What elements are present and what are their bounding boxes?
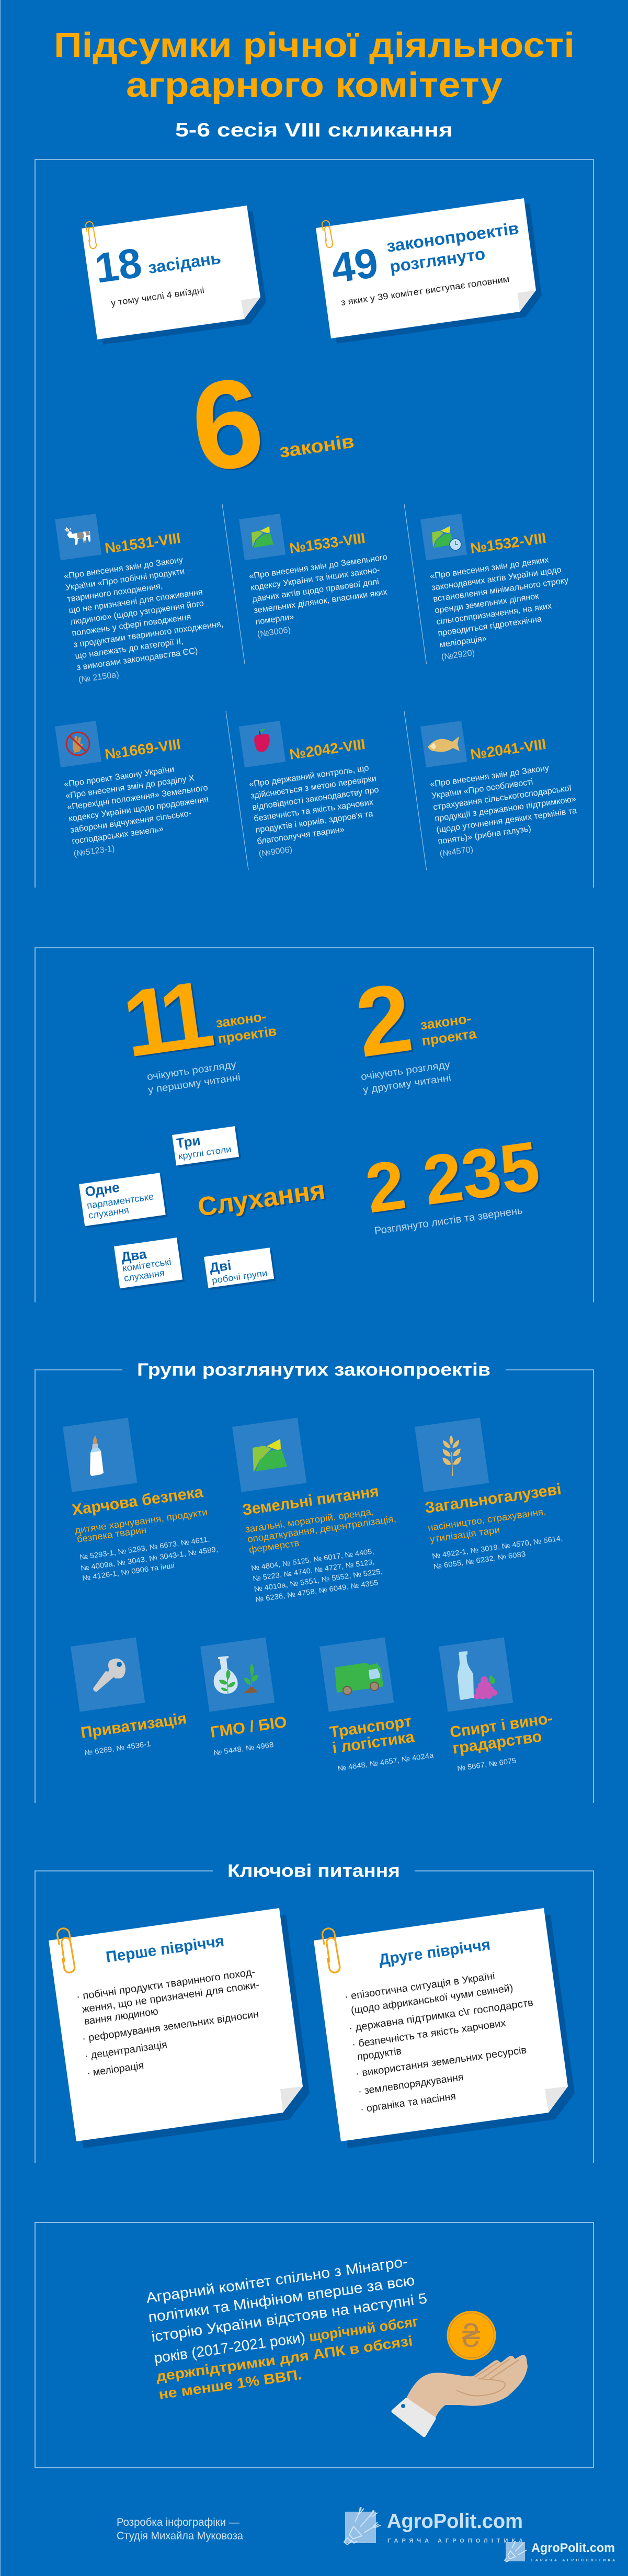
law text: понять)» (рибна галузь) [437, 824, 532, 846]
issue list [76, 1966, 260, 2079]
icon: hand [393, 2355, 528, 2435]
group: general: Загальногалузеві [424, 1481, 562, 1517]
law text [63, 760, 215, 859]
icon: paperclip [58, 1928, 75, 1972]
card: parliamentary hearing: слухання [88, 1205, 130, 1221]
stat: 2 235 letters: 2 235 [361, 1127, 544, 1228]
stat: 11 bills: очікують розгляду [146, 1059, 237, 1083]
card: round tables: Три [175, 1132, 201, 1151]
panel: bill groups [35, 1360, 593, 1803]
logo: AgroPolit small: AgroPolit.com [531, 2541, 615, 2555]
stat: 2 bills [350, 963, 477, 1096]
stat: 11 bills: 11 [117, 961, 218, 1077]
group: transport: і логістика [331, 1728, 416, 1757]
law text [248, 552, 396, 639]
icon: land with clock [420, 514, 467, 560]
label: засідань [147, 248, 222, 277]
law text: встановлення мінімального строку [432, 575, 569, 604]
credits: Розробка інфографіки — [117, 2516, 239, 2528]
icon: hryvnia coin [447, 2311, 496, 2360]
group: general: утилізація тари [429, 1524, 500, 1545]
law text: тваринного походження, [66, 581, 163, 604]
law text: України «Про особливості [431, 777, 533, 801]
law text [429, 760, 581, 859]
group: general: насінництво, страхування, [427, 1506, 546, 1533]
law text: продукції з державною підтримкою» [434, 795, 577, 823]
stat: 2 bills: у другому читанні [362, 1072, 452, 1096]
law text: «Про внесення змін до розділу X [65, 773, 195, 801]
law text: «Про внесення змін до Закону [63, 555, 184, 581]
group: spirits and wine [439, 1637, 554, 1773]
issue list: ження, що не призначені для спожи- [82, 1979, 260, 2015]
note heading: Перше півріччя [105, 1933, 225, 1966]
law text: «Про внесення змін до деяких [429, 555, 550, 581]
heading: Ключові питання [227, 1861, 400, 1881]
law number: №2042-VIII [289, 736, 366, 763]
card: committee hearings: Два [120, 1246, 148, 1265]
law 1669 [55, 721, 215, 859]
group: land: загальні, мораторій, оренда, [245, 1506, 374, 1535]
card: parliamentary hearing [79, 1173, 168, 1228]
icon: wheat [415, 1417, 489, 1492]
law text [248, 762, 386, 859]
stat: 11 bills: законо- [215, 1008, 267, 1031]
card: round tables [172, 1126, 241, 1167]
stat: 11 bills: у першому читанні [147, 1072, 241, 1096]
icon: hryvnia coin: ₴ [462, 2318, 481, 2354]
subtitle: 5-6 сесія VIII скликання [175, 119, 453, 141]
law number: №1531-VIII [104, 530, 181, 557]
group: privatization: № 6269, № 4536-1 [84, 1739, 151, 1757]
group: food safety: Харчова безпека [71, 1483, 204, 1519]
group: transport: № 4648, № 4657, № 4024а [337, 1751, 434, 1773]
group: spirits and wine: № 5667, № 6075 [456, 1756, 517, 1773]
icon: cow [55, 514, 101, 560]
law text: сільгосппризначення, на яких [436, 601, 552, 627]
group: spirits and wine: Спирт і вино- [449, 1710, 554, 1741]
panel frame [35, 1370, 593, 1803]
law text: «Про державний контроль, що [248, 763, 369, 789]
icon: key [71, 1637, 145, 1712]
icon: flask and plant [200, 1637, 275, 1712]
panel frame [35, 2222, 593, 2468]
card: parliamentary hearing: парламентське [86, 1191, 154, 1211]
law text: давчих актів щодо правової долі [252, 577, 380, 604]
stat: 2 bills: очікують розгляду [360, 1059, 451, 1083]
law number: №1533-VIII [289, 530, 366, 557]
logo: AgroPolit small: ГАРЯЧА АГРОПОЛІТИКА [531, 2559, 615, 2562]
note: 49 bills [316, 198, 542, 344]
group: GMO and bio: ГМО / БІО [209, 1713, 288, 1741]
law text: оренди земельних ділянок [434, 591, 540, 615]
group: GMO and bio: № 5448, № 4968 [213, 1740, 275, 1757]
title [54, 26, 575, 105]
group: land [232, 1417, 397, 1604]
icon: paperclip [86, 222, 96, 248]
issue list [344, 1970, 534, 2115]
law text: (№5123-1) [73, 844, 115, 859]
law text [429, 553, 578, 662]
icon: wheat and megaphone [505, 2541, 527, 2562]
law text: що не призначені для споживання [68, 587, 203, 615]
card: committee hearings [114, 1238, 185, 1290]
callout text: політики та Мінфіном вперше за всю [147, 2272, 416, 2325]
hearings heading: Слухання [196, 1175, 327, 1222]
group: privatization: Приватизація [79, 1710, 188, 1742]
law dividers [222, 504, 427, 870]
group: food safety: № 4009а, № 3043, № 3043-1, № 4589, [80, 1545, 219, 1572]
title: аграрного комітету [126, 65, 503, 105]
icon: baby bottle [63, 1417, 137, 1492]
icon: land [239, 514, 286, 560]
law text: (№4570) [439, 845, 474, 859]
credits [117, 2516, 243, 2542]
card: committee hearings: слухання [123, 1267, 165, 1284]
card: committee hearings: комітетські [122, 1256, 172, 1274]
label: розглянуто [389, 244, 486, 276]
group: general: № 6055, № 6232, № 6083 [433, 1549, 526, 1571]
issue list: · меліорація [86, 2060, 144, 2079]
law text: (щодо уточнення деяких термінів та [436, 805, 578, 835]
icon: paperclip [322, 221, 333, 247]
law text: благополуччя тварин» [256, 825, 345, 846]
law text: померли» [255, 612, 294, 627]
law text: що належать до категорії ІІ, [74, 637, 184, 661]
group: land: № 5223, № 4740, № 4727, № 5123, [252, 1557, 375, 1583]
panel frame [35, 160, 593, 888]
law 2041 [420, 721, 581, 859]
law text [63, 551, 229, 685]
icon: no touching [55, 721, 101, 767]
logo: AgroPolit large [344, 2507, 523, 2545]
stat: 2 bills: 2 [350, 963, 418, 1078]
callout text: держпідтримки для АПК в обсязі [155, 2333, 414, 2385]
logo: AgroPolit large: ГАРЯЧА АГРОПОЛІТИКА [387, 2538, 523, 2544]
law text: «Перехідні положення» Земельного [66, 783, 209, 812]
issue list: · використання земельних ресурсів [355, 2044, 527, 2080]
law text: законодавчих актів України щодо [431, 565, 562, 593]
law text: з продуктами тваринного походження, [73, 619, 224, 650]
note heading: Друге півріччя [378, 1936, 492, 1969]
law text: України «Про побічні продукти [65, 566, 185, 593]
stat: 11 bills: проектів [217, 1023, 278, 1047]
law 1533 [239, 514, 396, 639]
card: working groups: робочі групи [211, 1268, 268, 1286]
callout text: історію України відстояв на наступні 5 [151, 2290, 428, 2345]
panel frame [35, 1871, 593, 2163]
issue list: · органіка та насіння [360, 2091, 456, 2115]
group: land: № 4804, № 5125, № 6017, № 4405, [250, 1547, 374, 1572]
card: round tables: круглі столи [178, 1144, 232, 1161]
panel: state support [35, 2222, 593, 2468]
stat: 2 bills: законо- [419, 1011, 472, 1033]
stat: 2 235 letters: Розглянуто листів та звернень [374, 1205, 523, 1237]
note text: у тому числі 4 виїздні [110, 285, 205, 308]
group: transport [319, 1637, 434, 1773]
law text: заборони відчуження сільсько- [70, 809, 192, 835]
card: working groups [204, 1247, 276, 1290]
law text: людиною» (щодо узгодження його [70, 598, 204, 627]
law number: №1532-VIII [470, 530, 547, 557]
law text: безпечність та якість харчових [253, 797, 374, 823]
number 49: 49 [328, 239, 381, 292]
logo: AgroPolit small [505, 2541, 615, 2562]
group: privatization [71, 1637, 188, 1757]
card: parliamentary hearing: Одне [84, 1179, 120, 1199]
callout text: років (2017-2021 роки) щорічний обсяг [153, 2313, 419, 2366]
group: food safety: дитяче харчування, продукти [74, 1507, 208, 1536]
card: working groups: Дві [209, 1257, 232, 1276]
big number 6: 6 [183, 350, 271, 499]
group: general: № 4922-1, № 3019, № 4570, № 5614, [431, 1534, 563, 1560]
group: land: фермерств [248, 1538, 300, 1555]
group: food safety: № 5293-1, № 5293, № 6673, № 4611, [79, 1535, 210, 1561]
group: food safety: безпека тварин [76, 1525, 147, 1545]
callout text [145, 2253, 428, 2402]
stat: 11 bills [117, 961, 278, 1096]
issue list: · землевпорядкування [358, 2071, 464, 2097]
credits: Студія Михайла Муковоза [117, 2530, 243, 2542]
panel: summary and laws [35, 160, 593, 888]
law 1531 [55, 514, 229, 685]
law text: господарських земель» [71, 824, 164, 846]
issue list: · державна підтримка с\г господарств [348, 1997, 534, 2034]
group: land: № 6236, № 4758, № 6049, № 4355 [255, 1578, 379, 1604]
group: land: Земельні питання [241, 1483, 380, 1519]
note: 18 meetings [82, 206, 266, 345]
icon: fish [420, 721, 467, 767]
issue list: · децентралізація [84, 2039, 168, 2062]
law text: кодексу України щодо продовження [68, 795, 209, 823]
law text: кодексу України та інших законо- [250, 565, 380, 593]
logo: AgroPolit large: AgroPolit.com [387, 2510, 523, 2533]
icon: paperclip [323, 1928, 340, 1972]
law text: земельних ділянок, власники яких [253, 587, 388, 615]
issue list: · безпечність та якість харчових [351, 2017, 507, 2050]
law text: проводиться гідротехнічна [437, 614, 543, 638]
law text: меліорація» [439, 633, 487, 650]
label [385, 219, 520, 276]
law text: з вимогами законодавства ЄС) [76, 646, 198, 672]
issue list: вання людиною [84, 2005, 159, 2027]
callout text: Аграрний комітет спільно з Мінагро- [145, 2253, 409, 2306]
law text: продуктів і кормів, здоров'я та [255, 809, 374, 835]
law text: (№3006) [257, 625, 291, 639]
number 18: 18 [92, 239, 144, 292]
law text: положень у сфері поводження [71, 612, 191, 638]
issue list: · побічні продукти тваринного поход- [76, 1966, 256, 2003]
issue list: · реформування земельних відносин [82, 2008, 259, 2045]
panel: pending bills and hearings [35, 948, 593, 1302]
title: Підсумки річної діяльності [54, 26, 575, 65]
law text: «Про внесення змін до Земельного [248, 552, 388, 581]
law text: «Про внесення змін до Закону [429, 763, 550, 789]
law text: страхування сільськогосподарської [432, 783, 573, 812]
law text: (№2920) [441, 648, 475, 662]
laws label: законів [278, 430, 356, 462]
group: GMO and bio [200, 1637, 288, 1757]
law text: «Про проект Закону України [63, 764, 175, 789]
law 2042 [239, 721, 386, 859]
group: general [415, 1417, 563, 1571]
icon: apple [239, 721, 286, 767]
law text: (№9006) [258, 845, 293, 859]
icon: wheat and megaphone [344, 2507, 381, 2545]
stat: 2 bills: проекта [421, 1026, 477, 1049]
heading: Групи розглянутих законопроектів [137, 1360, 490, 1380]
callout text: не менше 1% ВВП. [158, 2367, 303, 2402]
group: food safety [63, 1417, 219, 1582]
panel: key issues [35, 1861, 593, 2163]
note: first half-year [49, 1908, 310, 2148]
note: second half-year [314, 1908, 575, 2148]
note text: з яких у 39 комітет виступає головним [340, 274, 510, 308]
law 1532 [420, 514, 578, 662]
group: food safety: № 4126-1, № 0906 та інші [82, 1561, 175, 1582]
issue list: продуктів [357, 2045, 402, 2063]
icon: truck [319, 1637, 394, 1712]
law text: здійснюється з метою перевірки [250, 774, 377, 801]
group: spirits and wine: градарство [451, 1728, 543, 1757]
law text: (№ 2150а) [78, 669, 120, 685]
issue list: · епізоотична ситуація в Україні [344, 1970, 496, 2003]
issue list: (щодо африканської чуми свиней) [350, 1982, 514, 2016]
group: transport: Транспорт [328, 1712, 413, 1741]
panel frame [35, 948, 593, 1302]
group: land: № 4010а, № 5551, № 5552, № 5225, [254, 1567, 383, 1593]
group: land: оподаткування, децентралізація, [247, 1513, 397, 1545]
icon: bottle and grapes [439, 1637, 513, 1712]
law number: №1669-VIII [104, 736, 181, 763]
law text: відповідності законодавству про [252, 785, 380, 812]
label: законопроектів [385, 219, 520, 256]
icon: land [232, 1417, 306, 1492]
law number: №2041-VIII [470, 736, 547, 763]
